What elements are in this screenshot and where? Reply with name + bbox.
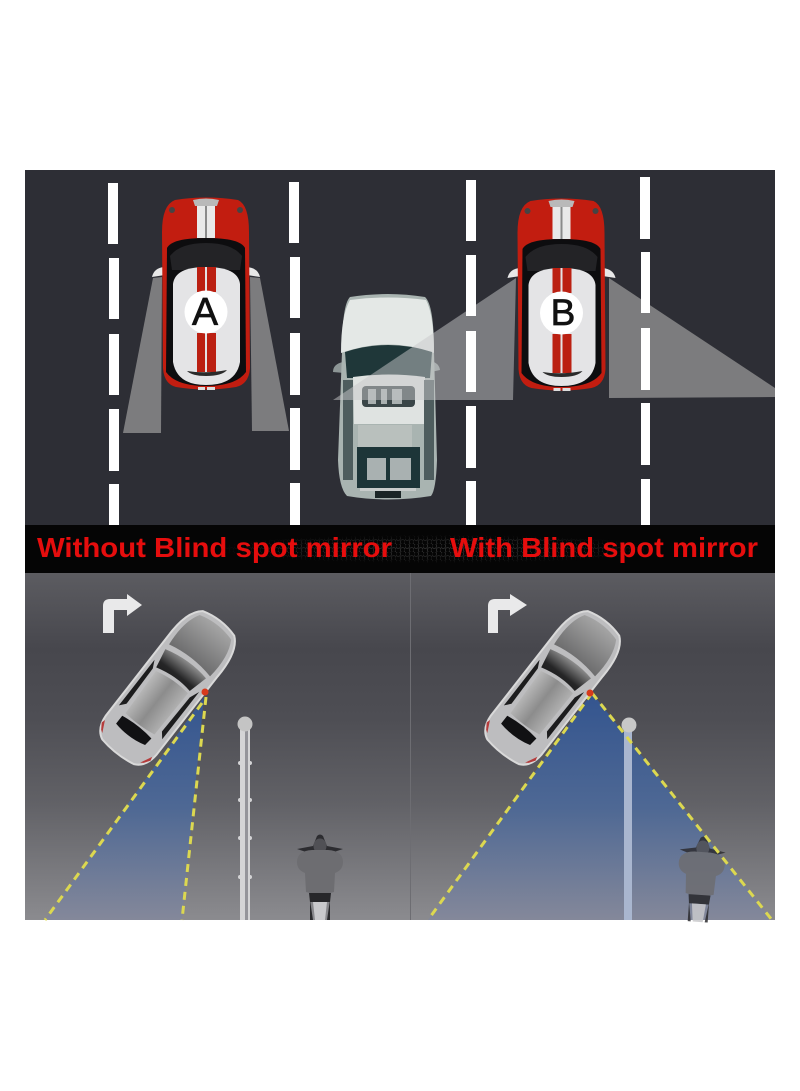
panel: top view of lanes (25, 170, 775, 525)
turning car (92, 601, 246, 773)
dashed view lines (428, 693, 772, 920)
car B (508, 198, 616, 391)
panel: turning with blind spot mirror (410, 573, 775, 923)
mirror view cones of car A (123, 277, 289, 433)
panel: turning without blind spot mirror (25, 573, 410, 920)
banner (25, 525, 775, 573)
car A (152, 198, 260, 390)
lamp post (238, 716, 252, 920)
lane markings (108, 182, 300, 525)
turning car (477, 601, 631, 773)
turn arrow (488, 594, 527, 633)
lane markings (466, 177, 650, 525)
caption: with mirror: With Blind spot mirror (450, 532, 758, 563)
wide view cone (428, 693, 772, 920)
caption: without mirror: Without Blind spot mirror (37, 532, 392, 563)
car B: B (551, 292, 575, 333)
motorcyclist (297, 834, 343, 920)
mirror view cones of car B (333, 278, 775, 400)
narrow view cone (45, 697, 206, 920)
silver SUV (333, 294, 440, 500)
lamp post (622, 718, 636, 920)
turn arrow (103, 594, 142, 633)
car A: A (192, 291, 218, 334)
motorcyclist (675, 835, 727, 923)
